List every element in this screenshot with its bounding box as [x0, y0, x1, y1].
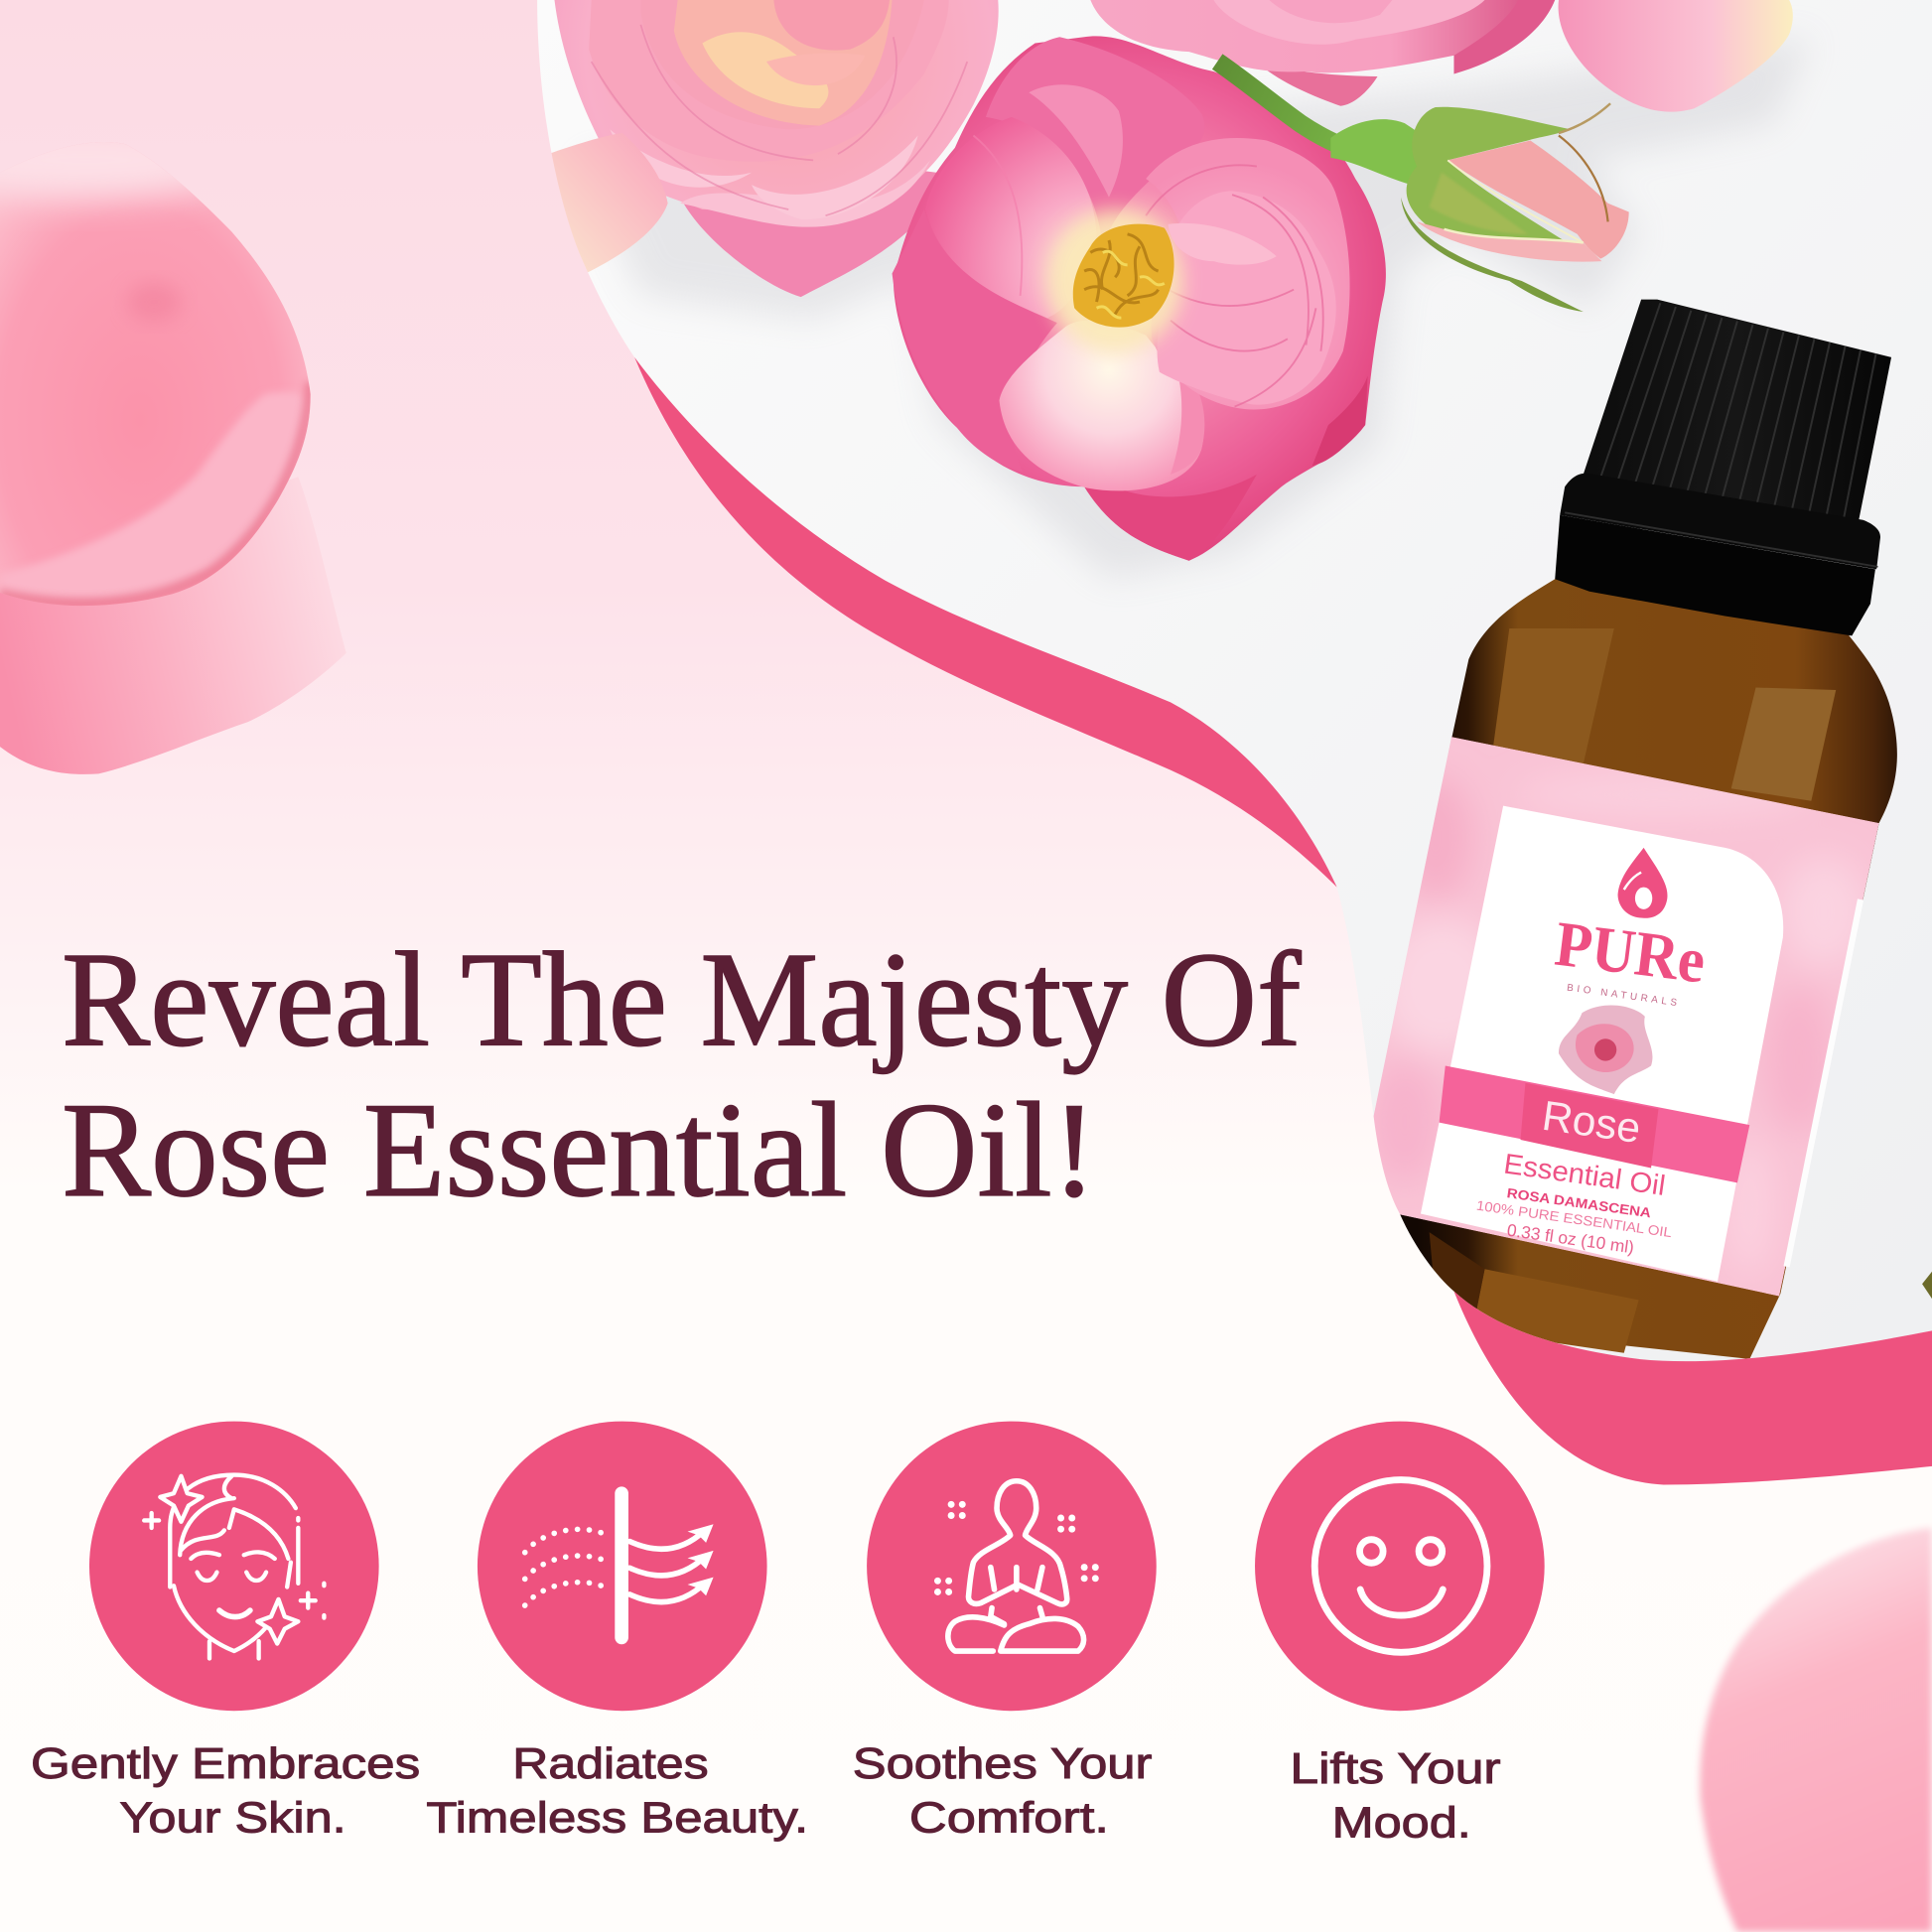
pink lower band — [1453, 1292, 1932, 1484]
top right rose — [1090, 0, 1555, 106]
yellow stamens — [1073, 224, 1174, 328]
heading line 1: Reveal The Majesty Of — [62, 923, 1302, 1074]
benefit 2 caption: Radiates — [512, 1740, 709, 1788]
label rose image — [1559, 1006, 1652, 1094]
benefit 1: skin — [89, 1422, 379, 1711]
benefit 3 caption — [853, 1740, 1152, 1842]
benefit 3: comfort — [867, 1422, 1157, 1711]
pale centre glow — [1047, 209, 1182, 352]
label text: volume: 0.33 fl oz (10 ml) — [1506, 1220, 1635, 1257]
flower shadows — [579, 37, 1811, 579]
bottom petal — [1000, 321, 1203, 490]
top left rose — [554, 0, 999, 297]
right cluster — [1146, 138, 1350, 409]
bottom right petal — [1700, 1528, 1932, 1932]
label logo drop icon — [1618, 848, 1667, 918]
benefit 4: mood — [1255, 1422, 1545, 1711]
icon: face with sparkles — [144, 1475, 324, 1658]
label text: Rosa Damascena: ROSA DAMASCENA — [1506, 1185, 1652, 1220]
lower left petal — [893, 209, 1057, 472]
small light petal — [1169, 223, 1277, 265]
small loose petal — [546, 133, 668, 274]
leaf tip at right edge — [1922, 1272, 1932, 1299]
benefit 1 caption: Gently Embraces — [31, 1740, 420, 1788]
label text: Essential Oil: Essential Oil — [1502, 1149, 1667, 1202]
glass highlights — [1493, 628, 1614, 763]
label edge highlight — [1787, 899, 1861, 1267]
icon: meditating figure — [948, 1481, 1084, 1651]
label pink band — [1440, 1066, 1749, 1182]
benefit 4 caption: Mood. — [1332, 1799, 1471, 1847]
benefit 2: beauty — [478, 1422, 767, 1711]
benefit 1 caption: Your Skin. — [119, 1794, 346, 1842]
label brand name: PURe — [1552, 907, 1710, 997]
pink swoosh — [634, 357, 1337, 888]
heading line 2: Rose Essential Oil! — [62, 1074, 1097, 1225]
benefit 2 caption: Timeless Beauty. — [426, 1794, 808, 1842]
icon: arrow heads — [688, 1524, 714, 1595]
label white panel — [1421, 806, 1783, 1282]
benefit 3 caption: Soothes Your — [853, 1740, 1152, 1788]
benefit 3 caption: Comfort. — [909, 1794, 1109, 1842]
cap — [1555, 300, 1891, 635]
top petal — [986, 37, 1204, 246]
product bottle — [1355, 300, 1897, 1359]
label text: purity: 100% PURE ESSENTIAL OIL — [1475, 1198, 1673, 1240]
stem and bud — [1217, 62, 1629, 312]
benefit 4 caption — [1290, 1745, 1501, 1847]
benefit 2 caption — [426, 1740, 808, 1842]
benefit 1 caption — [31, 1740, 420, 1842]
label text: Rose: Rose — [1540, 1092, 1643, 1152]
upper left petal — [0, 121, 311, 606]
heading — [62, 923, 1302, 1225]
benefit 4 caption: Lifts Your — [1290, 1745, 1501, 1793]
photo: rose flowers — [546, 0, 1811, 579]
icon: smiley face — [1314, 1480, 1487, 1652]
left rose petals — [0, 121, 346, 774]
bottle glass — [1370, 579, 1897, 1359]
label brand subtitle: BIO NATURALS — [1567, 983, 1678, 1009]
upper left petal — [925, 117, 1097, 318]
top right loose petal — [1559, 0, 1793, 112]
main pink flower — [893, 36, 1386, 561]
photo background — [517, 0, 1932, 1528]
icon: dots — [934, 1501, 1099, 1595]
label background — [1355, 737, 1879, 1297]
icon: radiating arrows — [525, 1493, 705, 1637]
lower left petal — [0, 477, 346, 774]
